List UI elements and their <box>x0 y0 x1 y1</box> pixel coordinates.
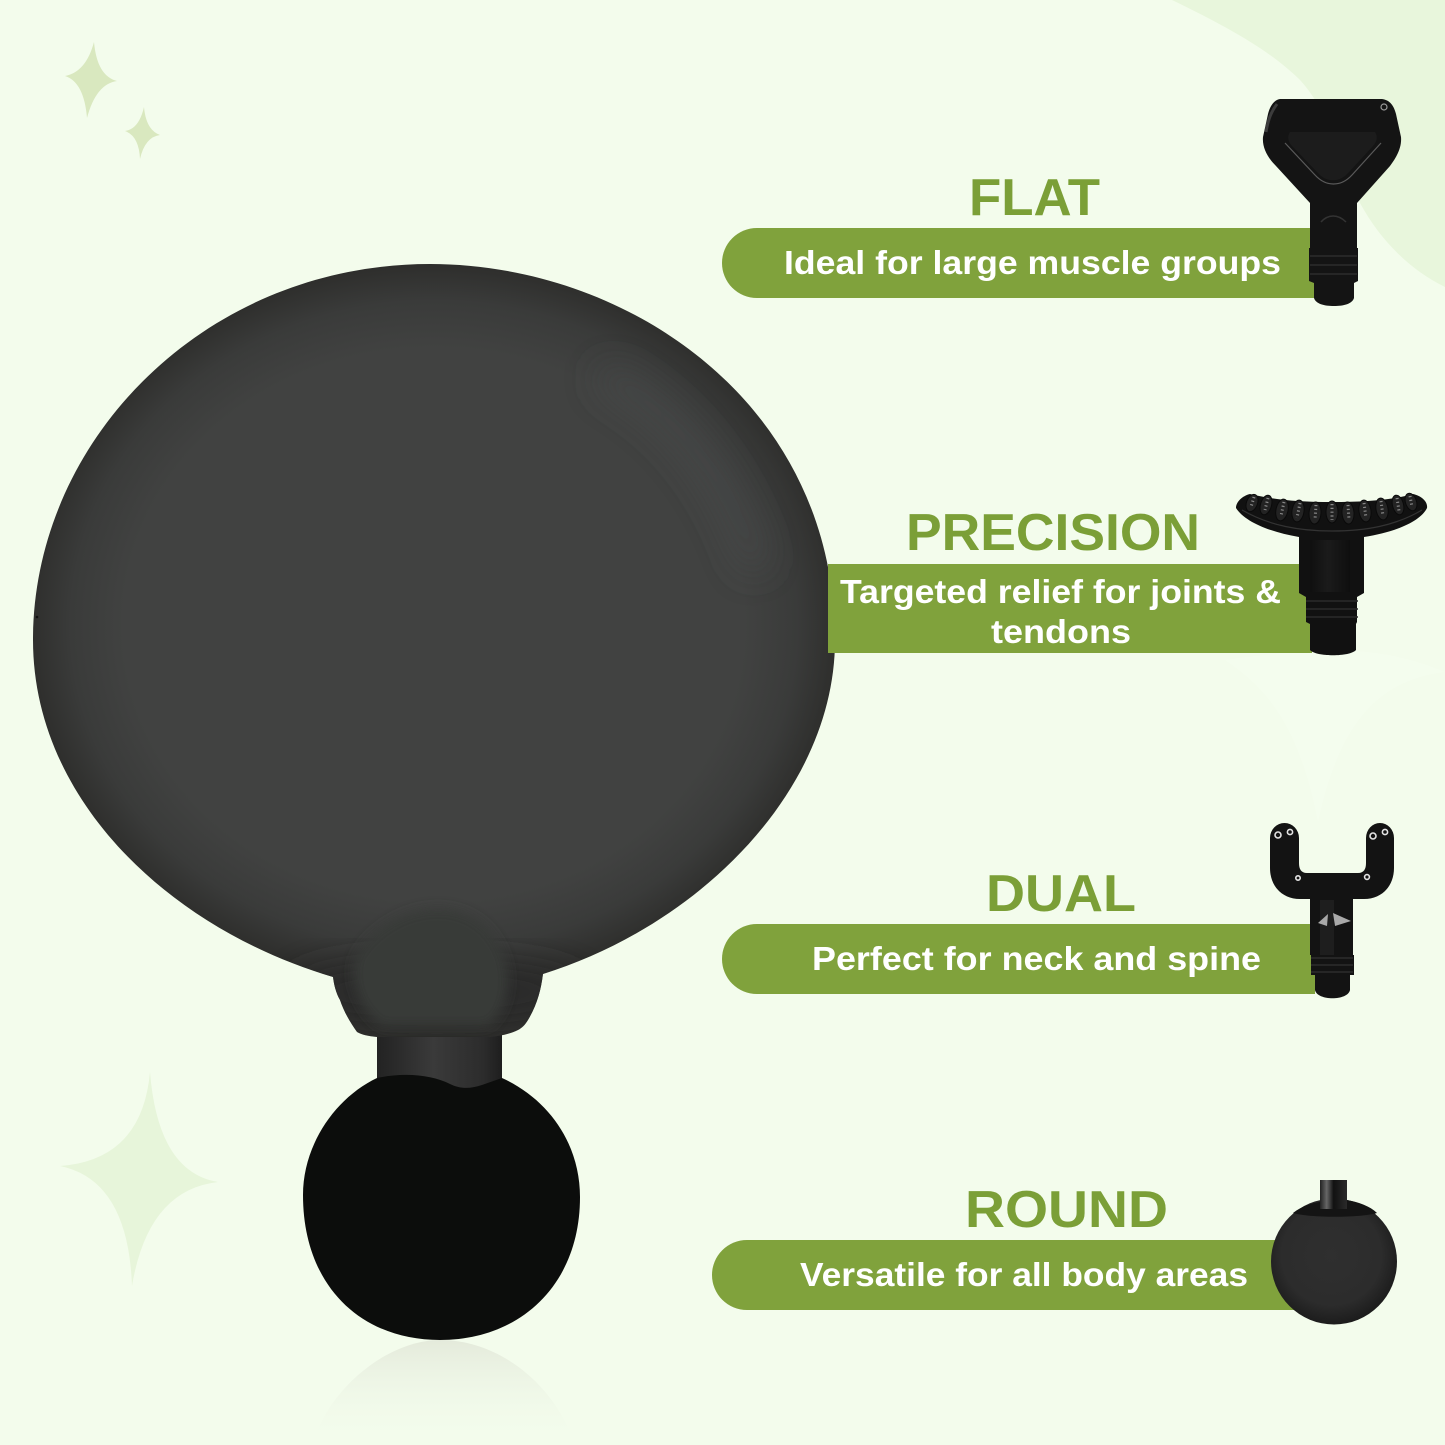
gun shaft <box>377 1030 502 1090</box>
attachment: precision head <box>1236 492 1427 655</box>
pill: flat <box>722 228 1315 298</box>
attachment: dual head <box>1270 823 1394 998</box>
item: precision <box>828 492 1427 655</box>
faint background shape <box>1225 650 1445 822</box>
heading: flat: FLAT <box>969 169 1100 227</box>
collar <box>1293 1200 1377 1217</box>
sparkle: top small <box>125 107 160 159</box>
pill: round <box>712 1240 1300 1310</box>
gun ball head <box>303 1075 580 1340</box>
massage ribs <box>1244 492 1419 524</box>
description: dual: Perfect for neck and spine <box>812 940 1261 977</box>
item: dual <box>722 823 1394 998</box>
ball <box>1271 1198 1397 1324</box>
neck bump <box>354 952 508 1026</box>
floor reflection <box>312 1340 575 1445</box>
pill: precision <box>828 564 1312 653</box>
background corner shape <box>1172 0 1445 287</box>
heading: precision: PRECISION <box>906 504 1200 562</box>
body neck shading <box>287 962 587 1022</box>
description: precision: Targeted relief for joints & <box>840 573 1281 610</box>
stem <box>1320 1180 1347 1212</box>
sparkle: bottom left <box>60 1072 218 1286</box>
gun body <box>33 264 835 1037</box>
massage gun <box>0 240 860 1340</box>
rib highlights <box>1251 496 1412 520</box>
sparkle: top large <box>65 42 117 118</box>
attachment: round head <box>1271 1180 1397 1324</box>
pill: dual <box>722 924 1315 994</box>
item: round <box>712 1180 1397 1324</box>
metal logo <box>1318 913 1351 926</box>
heading: dual: DUAL <box>986 865 1136 923</box>
item: flat <box>722 99 1401 306</box>
attachment: flat head <box>1263 99 1401 306</box>
body upper highlight band <box>610 378 755 560</box>
description: flat: Ideal for large muscle groups <box>784 244 1281 281</box>
heading: round: ROUND <box>965 1181 1168 1239</box>
description: precision: tendons <box>991 613 1131 650</box>
metal screws <box>1275 829 1388 880</box>
description: round: Versatile for all body areas <box>800 1256 1248 1293</box>
body side dot <box>36 616 38 618</box>
